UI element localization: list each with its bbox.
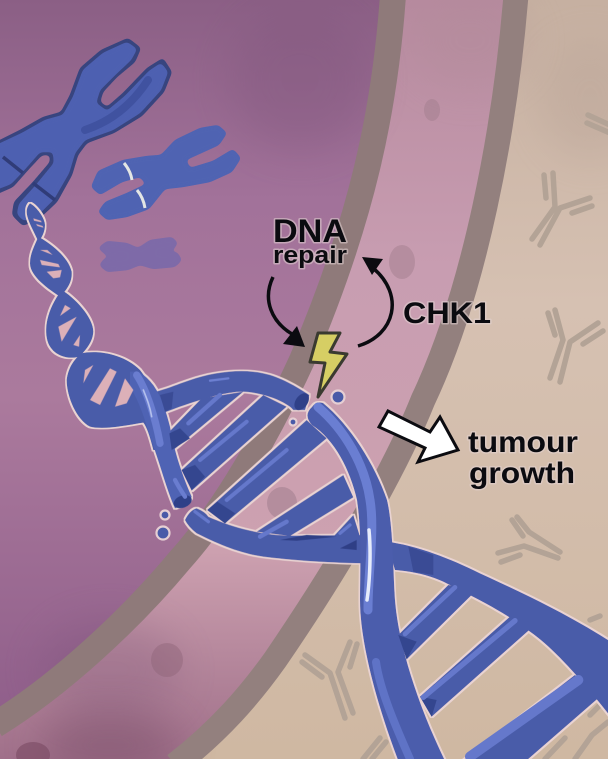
membrane band: outer	[175, 0, 516, 759]
chromosome: medium with white bands	[91, 125, 241, 220]
central helix: rungs and strands	[130, 371, 363, 563]
antibodies	[302, 115, 608, 759]
icon: lightning bolt DNA damage	[310, 333, 347, 397]
thin helix holes	[33, 218, 133, 407]
label: repair: repair	[273, 242, 347, 269]
chromosome: faded	[98, 237, 182, 272]
arrow: damage to DNA repair	[358, 257, 392, 346]
chromosome: large with DNA ends	[0, 38, 172, 226]
label: tumour: tumour	[468, 426, 578, 459]
label: growth: growth	[469, 457, 575, 490]
arrow: DNA repair to damage	[268, 277, 305, 347]
main front strand	[308, 402, 447, 759]
break fragments	[156, 390, 344, 540]
label: DNA: DNA	[273, 213, 347, 249]
DNA shading and highlights	[137, 375, 357, 550]
lower helix: back strand and rungs	[387, 542, 608, 759]
arrow: to tumour growth	[379, 411, 458, 462]
thin helix loops	[27, 203, 173, 450]
membrane band: inner	[0, 0, 393, 725]
organelle spots	[16, 99, 440, 759]
DNA double helix with break	[27, 203, 608, 759]
label: CHK1: CHK1	[403, 297, 491, 330]
